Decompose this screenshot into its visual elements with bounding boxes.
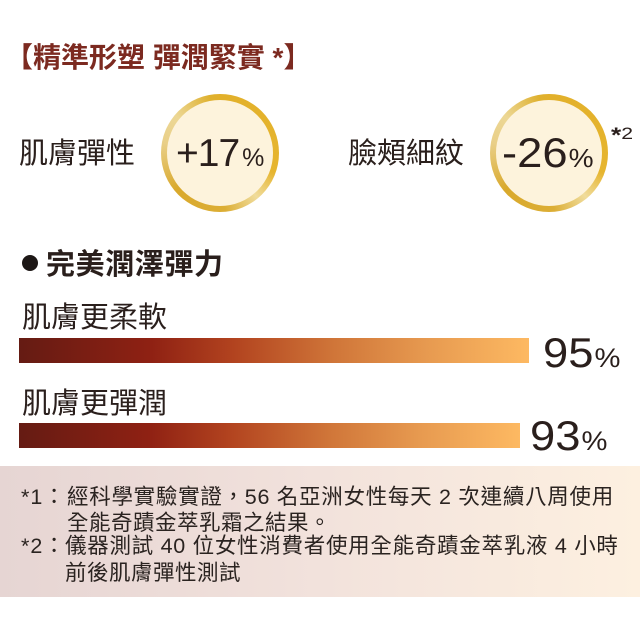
- stat: skin elasticity: [19, 94, 279, 212]
- label: skin elasticity: 肌膚彈性: [19, 138, 135, 170]
- footnote 2: *2：: [21, 534, 66, 558]
- title: 【精準形塑 彈潤緊實 *】: [5, 42, 311, 73]
- bar row: softer skin: [19, 302, 620, 376]
- badge: -26%: [490, 94, 608, 212]
- bar: [19, 423, 520, 448]
- footnote 1: [21, 485, 614, 535]
- panel: footnotes: [0, 466, 640, 597]
- label: facial fine lines: 臉頰細紋: [348, 138, 464, 170]
- badge: +17%: [161, 94, 279, 212]
- bar row: more elastic skin: [19, 388, 607, 459]
- footnote 1: *1：: [21, 485, 66, 509]
- footnote 2: 前後肌膚彈性測試: [65, 561, 241, 585]
- footnote 1: 經科學實驗實證，56 名亞洲女性每天 2 次連續八周使用: [67, 485, 614, 509]
- badge: +17%: +17%: [176, 132, 264, 175]
- heading text: 完美潤澤彈力: [46, 249, 224, 281]
- bar: [19, 338, 529, 363]
- section heading: [22, 248, 224, 281]
- footnote marker: *2: [611, 124, 633, 147]
- bar value: 93%: [530, 412, 607, 459]
- bar label: 肌膚更彈潤: [22, 388, 167, 420]
- footnote 2: 儀器測試 40 位女性消費者使用全能奇蹟金萃乳液 4 小時: [65, 534, 619, 558]
- bar label: 肌膚更柔軟: [22, 302, 167, 334]
- footnote 1: 全能奇蹟金萃乳霜之結果。: [67, 511, 331, 535]
- stat: facial fine lines: [348, 94, 633, 212]
- badge: -26%: -26%: [502, 129, 594, 176]
- footnote 2: [21, 534, 619, 585]
- bar value: 95%: [543, 329, 620, 376]
- bullet: [22, 255, 38, 271]
